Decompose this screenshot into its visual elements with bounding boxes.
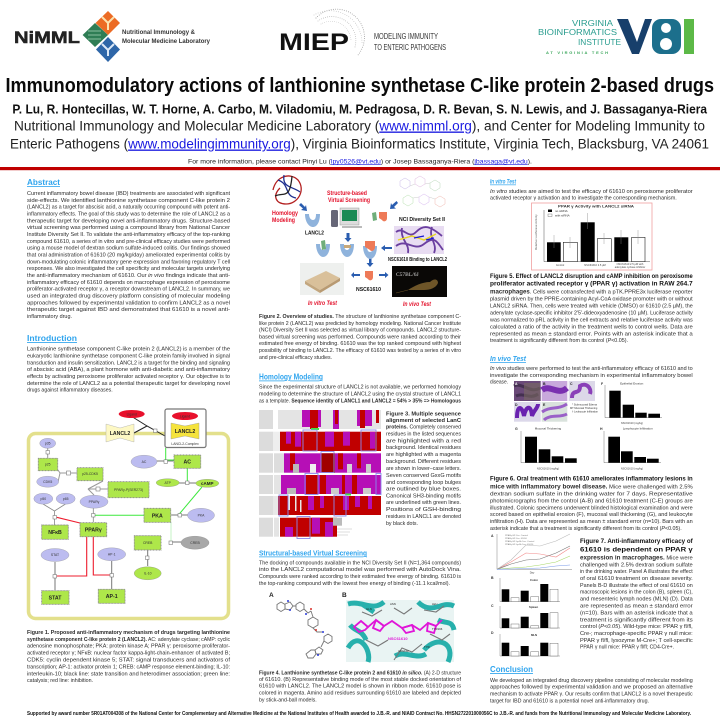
figure 7: colon bars xyxy=(491,576,560,602)
label: virtual screening: Structure-based xyxy=(327,191,367,197)
introduction text: transduction and insulin sensitization. LANCL2 is a target for the binding and signaling xyxy=(27,360,230,366)
figure 2 caption: Figure 2. Overview of studies. The structure of lanthionine synthetase component C- xyxy=(259,314,461,320)
figure 7 caption: Panels B-D illustrate the effect of oral 61610 on xyxy=(580,583,693,589)
abstract text: used an integrated drug discovery platform consisting of molecular modeling xyxy=(27,294,230,300)
node labels: cAMP xyxy=(201,481,214,486)
image: well plate xyxy=(300,263,344,295)
node labels: STAT xyxy=(49,596,62,602)
figure 3 caption: residues in LANCL1 are denoted xyxy=(386,514,461,520)
figure 7 caption: expression in macrophages. Mice were xyxy=(580,554,693,562)
alignment row 5 xyxy=(259,495,381,516)
complex box xyxy=(165,409,206,448)
figure 3 caption: are highlighted with a magenta xyxy=(386,452,462,458)
in vivo text: disease. xyxy=(490,380,508,386)
figure 3 caption: residues in the listed sequences xyxy=(386,432,461,438)
figure 5: bar chart: no siRNA xyxy=(555,209,568,213)
figure 6 caption: infiltration (H). Data are represented as mean ± standard error (n=10). Bars with an xyxy=(490,519,693,525)
homology text: modeling to determine the structure of LANCL2 using the crystal structure of LANCL1 xyxy=(259,392,461,398)
label: virtual screening xyxy=(327,191,370,204)
figure 4: panel B docking: LEU xyxy=(432,602,437,606)
node labels: PPARγ-P(SER273) xyxy=(114,488,143,492)
node labels: PPARγ xyxy=(85,528,102,534)
figure 7: line chart xyxy=(491,534,572,574)
logo: MIEP: MODELING IMMUNITY xyxy=(374,32,438,41)
figure 6: histology photos: A xyxy=(515,382,518,386)
figure 7 caption: Cre-; macrophage-specific PPAR γ null mice: xyxy=(580,631,693,637)
introduction text xyxy=(27,347,230,394)
logo: NIMML: Nutritional Immunology & xyxy=(122,29,195,36)
figure 1 caption: activated receptor γ; NFκB: nuclear factor kappa-light-chain-enhancer of activated B; xyxy=(27,651,230,657)
figure 4: panel B docking: B xyxy=(342,592,347,599)
node labels: AP-1 xyxy=(108,552,116,556)
authors: P. Lu, R. Hontecillas, W. T. Horne, A. Carbo, M. Viladomiu, M. Pedragosa, D. R. Bevan, S. N. Lewis, and J. Bassaganya-Riera xyxy=(12,102,708,116)
figure 4 caption: 61610 with LANCL2. The LANCL2 model is shown in ribbon mode. 61610 pose is xyxy=(259,684,461,690)
node labels: p50 xyxy=(40,497,46,501)
docked complexes xyxy=(316,240,377,259)
panel: abstract xyxy=(27,178,231,320)
figure 1 caption: adenosine monophosphate; PKA: protein kinase A; PPAR γ: peroxisome proliferator- xyxy=(27,644,230,650)
heading: virtual screening: Structural-based Virtual Screening xyxy=(259,548,367,558)
abstract text: (LANCL2) as a target for abscisic acid, a naturally occurring compound with potent anti- xyxy=(27,205,230,211)
figure 6 caption: mice with inflammatory bowel disease. Mice were challenged with 2.5% xyxy=(490,484,693,490)
figure 5: bar chart: PPAR γ Activity with LANCL2 siRNA xyxy=(558,204,634,208)
node labels: PKA xyxy=(198,514,205,518)
label: homology modeling xyxy=(272,211,299,224)
figure 7: MLN bars: D xyxy=(491,631,494,635)
abstract text: using a mouse model of dextran sodium sulfate-induced colitis. Our findings showed xyxy=(27,246,230,252)
figure 5 caption: adenylate cyclase-specific inhibitor 2'5'-dideoxyadenosine (10 µM). Luciferase activity xyxy=(490,311,693,317)
abstract text: down-modulating colonic inflammatory gene expression and favoring regulatory T cell xyxy=(27,259,230,265)
figure 5 caption: represented as mean ± standard error. Points with an asterisk indicate that a xyxy=(490,331,693,337)
logo: VBI: AT VIRGINIA TECH xyxy=(546,50,608,55)
abstract text: approaches followed by experimental validation to confirm LANCL2 as a novel xyxy=(27,300,230,306)
figure 3 caption: are outlined by blue boxes. xyxy=(386,486,461,492)
figure 7: colon bars: Colon xyxy=(530,578,538,582)
figure 6 caption: illustrated. Colonic specimens underwent blinded histological examination and were xyxy=(490,505,693,511)
figure 4 caption xyxy=(259,670,461,704)
figure 5 caption: treatment is significantly different from its control (P<0.05). xyxy=(490,338,628,344)
figure 4: panel A 2D structure: A xyxy=(269,592,274,599)
figure 7 caption: challenged with 2.5% dextran sodium sulfate xyxy=(580,562,693,568)
protein structure xyxy=(273,175,301,204)
figure 7: spleen bars: C xyxy=(491,604,494,608)
green nodes xyxy=(38,455,201,604)
figure 2 caption: possibility of binding to LANCL2. The efficacy of 61610 was tested by a series of in vitro xyxy=(259,348,461,354)
figure 6 caption xyxy=(490,476,693,532)
compound library xyxy=(400,176,445,207)
complex box: LANCL2-Complex xyxy=(171,442,199,446)
figure 7: line chart: PPARγ fl/fl Cre- Control xyxy=(505,534,528,537)
figure 7 caption: PPAR γ null mice: PPAR γ fl/fl; CD4-Cre+. xyxy=(580,645,674,651)
figure 7: spleen bars: Spleen xyxy=(529,605,538,609)
introduction text: of abscisic acid (ABA), a plant hormone with anti-diabetic and anti-inflammatory xyxy=(27,367,230,373)
figure 6: chart H leukocyte infiltration: NSC61610 (mg/kg) xyxy=(621,466,643,470)
in vitro text: In vitro studies are aimed to test the efficacy of 61610 on peroxisome proliferator xyxy=(490,189,693,195)
figure 5: bar chart xyxy=(532,203,652,270)
label: in vivo test: In vivo Test xyxy=(403,302,432,308)
panel: homology modeling xyxy=(259,372,461,404)
node labels: PPARγ xyxy=(89,500,100,504)
abstract text: that oral administration of 61610 (20 mg/kg/day) ameliorated experimental colitis by xyxy=(27,252,230,258)
icon: NSC61610 compound xyxy=(365,271,373,280)
screening text: The docking of compounds available in the NCI Diversity Set II (N=1,364 compounds) xyxy=(259,560,461,566)
conclusion text: mechanism to activate PPAR γ. Our results confirm that LANCL2 is a novel therapeutic xyxy=(490,692,693,698)
figure 3 caption: are underlined with green lines. xyxy=(386,500,461,506)
figure 6: histology photos xyxy=(514,381,599,422)
conclusion text: target for IBD and 61610 is a potential novel anti-inflammatory drug. xyxy=(490,699,649,705)
figure 1 caption xyxy=(27,630,231,684)
in vivo text: investigate the corresponding mechanism in experimental inflammatory bowel xyxy=(490,373,693,379)
figure 3 caption: Canonical SH3-binding motifs xyxy=(386,494,461,500)
process markers xyxy=(46,429,189,578)
figure 3 caption: are highlighted with a red xyxy=(386,438,461,444)
figure 7 caption: (n=10). Bars with an asterisk indicate that a xyxy=(580,611,693,617)
logo: VBI: INSTITUTE xyxy=(578,38,621,47)
logo: MIEP: TO ENTERIC PATHOGENS xyxy=(374,43,446,52)
screening text: into the LANCL2 computational model was performed with AutoDock Vina. xyxy=(259,567,461,573)
icon: small ligands xyxy=(372,212,387,221)
figure 3 caption: Figure 3. Multiple sequence xyxy=(386,412,462,418)
node labels: CREB xyxy=(143,541,153,545)
alignment row 1 xyxy=(259,410,381,430)
figure 4: panel B docking: ARG102 xyxy=(398,649,409,653)
logo: VBI xyxy=(538,19,694,55)
figure 5 caption: calculated a ratio of the activity in the treatment wells to control wells. Data are xyxy=(490,324,693,330)
introduction text: effects by activating peroxisome proliferator activated receptor γ. Our objective is to xyxy=(27,374,230,380)
connector lines xyxy=(43,416,202,590)
label: homology modeling: Modeling xyxy=(272,218,295,224)
homology text: as a template. Sequence identity of LANCL1 and LANCL2 = 54% > 35% => Homologous xyxy=(259,398,461,404)
figure 5 caption: proliferator activated receptor γ (PPAR γ) activation in RAW 264.7 xyxy=(490,280,693,288)
figure 7 caption: are represented as mean ± standard error xyxy=(580,604,693,610)
figure 4 caption: colored in magenta. Amino acid residues surrounding 61610 are labeled and depicted xyxy=(259,691,461,697)
affiliations: Nutritional Immunology and Molecular Medicine Laboratory ( www.nimml.org), and Center for Modeling Immunity to xyxy=(14,118,705,134)
figure 2 caption: (NCI) Diversity Set II was selected as virtual library of compounds. LANCL2 structure- xyxy=(259,328,461,334)
figure 6: histology photos: † Leukocyte Infiltration xyxy=(572,410,599,414)
cell boundary xyxy=(28,434,228,618)
figure 3 caption: proteins. Completely conserved xyxy=(386,424,461,430)
figure 1 caption: interleukin-10; black line: state transition and heterodimer association; green line: xyxy=(27,671,230,677)
figure 1 caption: synthetase component C-like protein 2 (LANCL2). AC: adenylate cyclase; cAMP: cyclic xyxy=(27,637,230,643)
figure 4 caption: by stick-and-ball models. xyxy=(259,698,317,704)
figure 1: pathway diagram xyxy=(28,409,228,618)
complex box: Ligand xyxy=(180,414,190,418)
figure 4: panel A 2D structure xyxy=(269,592,332,658)
figure 2: overview of studies xyxy=(272,175,447,308)
figure 6: chart F epithelial erosion: F xyxy=(601,382,604,386)
homology text xyxy=(259,385,461,404)
figure 4: panel B docking: TYR196 xyxy=(432,627,443,631)
ligand and LANCL2 inputs xyxy=(106,410,145,442)
node labels: p65 xyxy=(63,497,69,501)
figure 7: spleen bars xyxy=(491,604,560,628)
ligand and LANCL2 inputs: LANCL2 xyxy=(110,431,130,437)
figure 6: chart G mucosal thickening: NSC61610 (mg/kg) xyxy=(537,466,559,470)
figure 5: bar chart: adenylate cyclase inhibitor xyxy=(615,265,645,269)
figure 1 caption: CDK5: cyclin dependent kinase 5; STAT: signal transducers and activators of xyxy=(27,657,230,663)
label: binding: NSC61610 Binding to LANCL2 xyxy=(388,257,447,263)
label: homology modeling: Homology xyxy=(272,211,299,217)
in vitro text: activated receptor γ activation and to investigate the corresponding mechanism. xyxy=(490,196,677,202)
figure 7: MLN bars: MLN xyxy=(531,633,537,637)
figure 5 caption: plasmid driven by the PPRE-containing Acyl-CoA oxidase promoter with or without xyxy=(490,297,693,303)
figure 2 caption: and pre-clinical efficacy studies. xyxy=(259,355,332,361)
figure 6: histology photos: C xyxy=(570,382,573,386)
figure 3: sequence alignment xyxy=(259,410,462,538)
binding image xyxy=(394,226,444,254)
figure 6: chart F epithelial erosion: NSC61610 (mg/kg) xyxy=(621,421,643,425)
figure 7: line chart: A xyxy=(491,534,494,538)
in vivo text: In vivo studies were performed to test the anti-inflammatory efficacy of 61610 and to xyxy=(490,366,693,372)
abstract text: side-effects. We identified lanthionine synthetase component C-like protein 2 xyxy=(27,198,230,204)
abstract text: inflammatory effects. The goal of this study was to determine the role of LANCL2 as a xyxy=(27,212,231,218)
introduction text: Lanthionine synthetase component C-like protein 2 (LANCL2) is a member of the xyxy=(27,347,230,353)
logo: NIMML: Molecular Medicine Laboratory xyxy=(122,38,210,45)
left ellipses xyxy=(34,438,214,562)
node labels: ATP xyxy=(165,481,172,485)
figure 7: line chart: PPARγ fl/fl Cre- 61610 xyxy=(505,537,528,540)
label: LANCL2: LANCL2 xyxy=(305,231,324,237)
figure 6: histology photos: E xyxy=(543,403,546,407)
node labels: p25-CDK5 xyxy=(82,472,98,476)
in vitro text xyxy=(490,189,693,202)
screening text: the top-ranking compound with the lowest free energy of binding (-11.1 kcal/mol). xyxy=(259,581,450,587)
figure 7 caption: Figure 7. Anti-inflammatory efficacy of xyxy=(580,538,694,545)
icon: computer xyxy=(331,208,362,228)
panel: in vivo test xyxy=(490,354,693,386)
figure 4 caption: of 61610. (B) Representative binding mode of the most stable docked orientation of xyxy=(259,677,461,683)
heading: abstract: Abstract xyxy=(27,178,60,187)
figure 7: line chart: PPARγ fl/fl LysM-Cre+ 61610 xyxy=(505,543,534,546)
figure 3 caption: are shown in lower–case letters. xyxy=(386,466,461,472)
figure 7: MLN bars xyxy=(491,631,560,656)
figure 3 caption: by black dots. xyxy=(386,521,418,527)
logo: NIMML: NiMML xyxy=(14,28,80,47)
figure 4: panel B docking: NSC61610 xyxy=(388,636,408,641)
figure 6: chart G mucosal thickening: Mucosal Thickening xyxy=(535,426,562,430)
label: NSC61610: NSC61610 xyxy=(356,287,381,293)
figure 7: line chart: Day xyxy=(530,570,535,574)
in vivo text xyxy=(490,366,693,386)
homology text: Since the experimental structure of LANCL2 is not available, we performed homology xyxy=(259,385,461,391)
figure 5 caption xyxy=(489,273,693,344)
logo: VBI: BIOINFORMATICS xyxy=(538,28,617,37)
figure 6: chart G mucosal thickening: G xyxy=(515,427,518,431)
affiliations xyxy=(10,118,709,152)
figure 5 caption: was normalized to pRL activity in the cell extracts and relative luciferase activity was xyxy=(489,317,693,323)
heading: homology modeling: Homology Modeling xyxy=(259,372,323,382)
figure 6 caption: photomicrographs from the control (A-B) and 61610 treatment (C-E) groups are xyxy=(490,498,693,504)
complex box: LANCL2 xyxy=(175,429,195,435)
node labels: CDK5 xyxy=(43,480,52,484)
abstract text: responses. We also investigated the cell specificity and molecular targets underlying xyxy=(27,266,230,272)
introduction text: determine the role of LANCL2 as a potential therapeutic target for developing novel xyxy=(27,381,230,387)
panel: in vitro test xyxy=(490,178,693,202)
alignment row 3 xyxy=(259,452,381,473)
figure 4: panel B docking: GLN xyxy=(366,607,372,611)
introduction text: eukaryotic lanthionine synthetase component C-like protein family involved in signal xyxy=(27,354,230,360)
alignment row 6 xyxy=(259,516,352,538)
logo: MIEP: MIEP xyxy=(279,29,349,56)
figure 4 caption: Figure 4. Lanthionine synthetase C-like protein 2 and 61610 in silico. (A) 2-D structure xyxy=(259,670,461,676)
figure 6: chart F epithelial erosion xyxy=(601,382,662,425)
figure 7 caption: treatment is significantly different from its xyxy=(580,617,693,623)
node labels: STAT xyxy=(51,553,59,557)
figure 6: histology photos: D xyxy=(515,403,518,407)
conclusion text xyxy=(490,678,693,705)
panel: conclusion xyxy=(490,664,693,705)
image: mouse xyxy=(392,266,447,297)
figure 3 caption: Positions of GSH-binding xyxy=(386,507,461,513)
figure 3 caption: alignment of selected LanC xyxy=(386,418,462,424)
figure 6 caption: Figure 6. Oral treatment with 61610 ameliorates inflammatory lesions in xyxy=(490,476,693,482)
figure 6: histology photos: B xyxy=(543,382,546,386)
figure 7 caption: macroscopic lesions in the colon (B), spleen (C), xyxy=(580,590,693,596)
conclusion text: We developed an integrated drug discovery pipeline consisting of molecular modeling xyxy=(490,678,693,684)
abstract text: compound 61610, a series of in vitro and pre-clinical efficacy studies were performed xyxy=(27,239,230,245)
node labels: AC xyxy=(142,460,147,464)
ligand and LANCL2 inputs: Ligand xyxy=(127,412,137,416)
figure 7 caption: control (P<0.05). Wild-type mice: PPAR γ fl/fl, xyxy=(580,624,693,630)
figure 7 caption xyxy=(580,538,694,651)
panel: introduction xyxy=(27,333,230,394)
node labels: AP-1 xyxy=(106,594,118,600)
figure 6: chart H leukocyte infiltration xyxy=(600,426,661,470)
image: mouse: C57BL/6J xyxy=(396,272,419,278)
abstract text: therapeutic target for developing novel anti-inflammatory drugs. Structure-based xyxy=(27,218,230,224)
figure 7 caption: in the drinking water. Panel A illustrates the effect xyxy=(580,569,693,575)
figure 4: panel B docking: ASN xyxy=(390,602,396,606)
heading: conclusion: Conclusion xyxy=(490,664,533,674)
screening text: Compounds were ranked according to their estimated free energy of binding. 61610 is xyxy=(259,574,461,580)
figure 6 caption: dextran sodium sulfate in the drinking water for 7 days. Representative xyxy=(490,492,693,498)
figure 2 caption: based virtual screening was performed. Compounds were ranked according to their xyxy=(259,334,461,340)
figure 3 caption: background. Identical residues xyxy=(386,445,461,451)
contact line: For more information, please contact Pinyi Lu ( lpy0526@vt.edu ) or Josep Bassaganya-Riera ( jbassaga@vt.edu ). xyxy=(188,158,532,165)
figure 2 caption: estimated free energy of binding. 61610 was the top ranked compound with highest xyxy=(259,341,461,347)
figure 6: chart H leukocyte infiltration: H xyxy=(600,427,603,431)
icon: LANCL2 receptor xyxy=(305,214,320,227)
arrows xyxy=(299,201,398,278)
figure 7 caption: PPAR γ fl/fl, lysozyme M-Cre+; T cell-specific xyxy=(580,638,693,644)
figure 5 caption: LANCL2 siRNA. Then, cells were treated with vehicle (DMSO) or 61610 (2.5 µM), the xyxy=(490,304,693,310)
figure 5: bar chart: NSC61610 2.5 µM xyxy=(584,263,606,267)
heading: introduction: Introduction xyxy=(27,333,77,343)
node labels: CREB xyxy=(190,541,200,545)
figure 3 caption: Seven conserved GxxG motifs xyxy=(386,473,461,479)
figure 7 caption: and mesenteric lymph nodes (MLN) (D). Data xyxy=(580,597,693,603)
abstract text: Institute Diversity Set II. To validate the anti-inflammatory efficacy of the top-ranking xyxy=(27,232,230,238)
figure 3 caption xyxy=(386,412,462,527)
node labels: NFκB xyxy=(48,530,62,536)
screening text xyxy=(259,560,461,587)
affiliations: Enteric Pathogens (www.modelingimmunity.org), Virginia Bioinformatics Institute, Virginia Tech, Blacksburg, VA 24061 xyxy=(10,136,709,152)
abstract text: inflammatory efficacy of 61610 depends on macrophage expression of peroxisome xyxy=(27,280,230,286)
logo: MIEP xyxy=(279,9,446,56)
figure 5: bar chart: Relative Luciferase Activity xyxy=(534,214,538,250)
alignment row 2 xyxy=(259,430,381,451)
abstract text: Current inflammatory bowel disease (IBD) treatments are associated with significant xyxy=(27,191,230,197)
figure 6: histology photos: MT Mucosal Thickening xyxy=(570,406,598,410)
figure 6: chart G mucosal thickening xyxy=(515,426,577,470)
figure 5: bar chart: with siRNA xyxy=(555,214,570,218)
figure 6: chart F epithelial erosion: Epithelial Erosion xyxy=(620,382,644,386)
logo: VBI: VIRGINIA xyxy=(572,19,614,28)
conclusion text: approaches followed by experimental validation and we proposed an alternative xyxy=(490,685,693,691)
heading: in vitro test: In vitro Test xyxy=(490,178,516,186)
red divider xyxy=(0,167,720,170)
alignment row 4 xyxy=(259,474,381,496)
introduction text: drugs against inflammatory diseases. xyxy=(27,388,113,394)
logo: NIMML xyxy=(14,11,210,62)
figure 5: bar chart: Control xyxy=(556,263,565,267)
figure 2 caption: like protein 2 (LANCL2) was predicted by homology modeling. National Cancer Institute xyxy=(259,321,461,327)
figure 7 caption: of oral 61610 treatment on disease severity. xyxy=(580,576,693,582)
figure 3 caption: background. Different residues xyxy=(386,459,461,465)
figure 5 caption: Figure 5. Effect of LANCL2 disruption and cAMP inhibition on peroxisome xyxy=(490,273,693,280)
abstract text: virtual screening was performed using a compound library from National Cancer xyxy=(27,225,230,231)
figure 5: bar chart: NSC61610 2.5 µM with xyxy=(617,262,644,266)
node labels: p25 xyxy=(45,462,51,466)
node labels: p35 xyxy=(45,442,51,446)
figure 6: histology photos: * Submucosal Edema xyxy=(572,402,597,406)
label: virtual screening: Virtual Screening xyxy=(328,198,370,204)
figure 1 caption: Figure 1. Proposed anti-inflammatory mechanism of drugs targeting lanthionine xyxy=(27,630,231,636)
figure 1 caption: transcription; AP-1: activator protein 1; CREB: cAMP response element-binding; IL-10: xyxy=(27,664,230,670)
node labels xyxy=(40,442,214,602)
figure 1 caption: catalysis; red line: inhibition. xyxy=(27,678,93,684)
figure 3 caption: and corresponding loop bulges xyxy=(386,480,461,486)
label: in vitro test: In vitro Test xyxy=(308,301,338,307)
abstract text: therapeutic target against IBD and demonstrated that 61610 is a novel anti- xyxy=(27,307,230,313)
abstract text: proliferator-activated receptor γ, a receptor downstream of LANCL2. In summary, we xyxy=(27,287,230,293)
abstract text: the anti-inflammatory mechanism of 61610. Our in vivo findings indicate that anti- xyxy=(27,273,230,279)
heading: in vivo test: In vivo Test xyxy=(490,354,526,363)
label: NCI set: NCI Diversity Set II xyxy=(399,217,445,223)
node labels: AC xyxy=(184,460,191,466)
figure 7: line chart: PPARγ fl/fl LysM-Cre+ Control xyxy=(505,540,535,543)
figure 4: panel B docking xyxy=(342,592,454,662)
node labels: IL-10 xyxy=(144,572,152,576)
abstract text xyxy=(27,191,231,320)
abstract text: inflammatory drug. xyxy=(27,314,72,320)
figure 6 caption: scored based on epithelial erosion (F), mucosal wall thickening (G), and leukocyte xyxy=(490,512,693,518)
figure 5 caption: macrophages. Cells were cotransfected with a pTK.PPRE3x luciferase reporter xyxy=(490,288,693,296)
figure 4: panel B docking: TYR xyxy=(424,645,430,649)
figure 7 caption: 61610 is dependent on PPAR γ xyxy=(580,546,693,554)
figure 7: colon bars: B xyxy=(491,576,494,580)
figure 2 caption xyxy=(259,314,461,361)
figure 6: chart H leukocyte infiltration: Lymphocyte Infiltration xyxy=(623,426,653,430)
node labels: PKA xyxy=(152,513,163,519)
panel: structural-based virtual screening xyxy=(259,548,461,587)
figure 6 caption: asterisk indicate that a treatment is significantly different from its control (P<0.05). xyxy=(490,526,682,532)
